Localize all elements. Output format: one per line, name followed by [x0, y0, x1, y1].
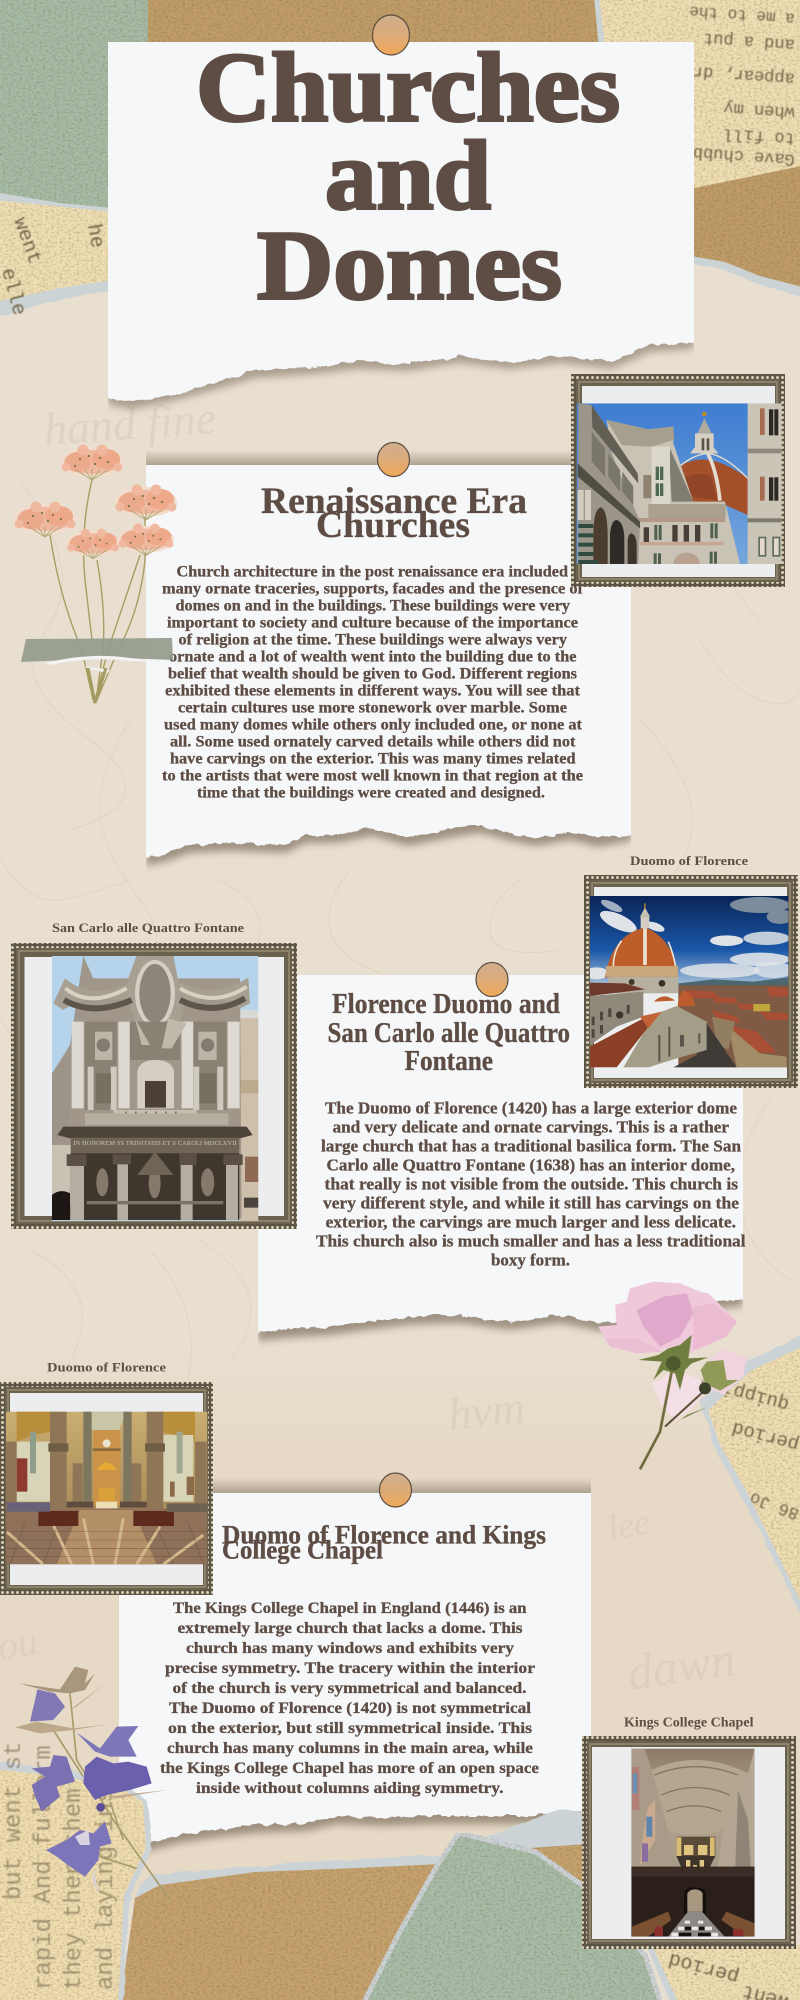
collage: left newsprint: he — [81, 222, 108, 250]
body text — [160, 1600, 539, 1797]
collage: bottom right newsprint — [646, 1945, 800, 2000]
pin — [380, 1473, 412, 1507]
body text: that really is not visible from the outside. This church is — [324, 1174, 739, 1194]
pin — [378, 442, 410, 476]
collage: top right newsprint — [594, 0, 800, 188]
body text: certain cultures use more stonework over marble. Some — [178, 700, 567, 717]
heading: Churches — [316, 505, 470, 546]
body text: to the artists that were most well known in that region at the — [162, 768, 583, 785]
icon: pink rose — [598, 1282, 747, 1469]
image caption: Duomo of Florence — [630, 853, 748, 868]
body text: church has many windows and exhibits very — [186, 1640, 514, 1657]
body text: have carvings on the exterior. This was many times related — [170, 751, 576, 768]
title — [196, 34, 620, 320]
collage: top right newsprint: to fill — [723, 123, 795, 147]
body text — [316, 1098, 746, 1270]
image: Duomo of Florence exterior with frame — [571, 374, 785, 587]
image: Duomo of Florence aerial with frame — [584, 875, 798, 1088]
body text: church has many columns in the main area, while — [167, 1740, 533, 1757]
body text: The Kings College Chapel in England (1446) is an — [173, 1600, 527, 1617]
body text: precise symmetry. The tracery within the interior — [165, 1660, 535, 1677]
body text — [162, 564, 584, 802]
collage: top right newsprint: a me to the — [689, 2, 795, 27]
collage: bottom brown paper — [120, 1808, 600, 2000]
collage: bottom left newsprint: and laying ins — [93, 1788, 120, 1990]
icon: pressed purple flowers — [15, 1667, 170, 1900]
heading — [222, 1521, 546, 1564]
body text: large church that has a traditional basilica form. The San — [321, 1136, 741, 1156]
collage: right newsprint — [698, 1332, 800, 1625]
heading: Fontane — [404, 1046, 493, 1077]
panel: Renaissance Era Churches — [130, 442, 650, 866]
collage: top left green paper — [0, 0, 151, 214]
body text: on the exterior, but still symmetrical inside. This — [168, 1720, 532, 1737]
heading — [261, 481, 527, 546]
background paper: lee — [604, 1501, 653, 1548]
title card paper — [90, 42, 710, 409]
collage: bottom left newsprint — [0, 1742, 152, 2000]
body text: The Duomo of Florence (1420) has a large exterior dome — [325, 1098, 737, 1118]
background paper: dawn — [624, 1630, 739, 1701]
body text: The Duomo of Florence (1420) is not symmetrical — [169, 1700, 532, 1717]
body text: exterior, the carvings are much larger and less delicate. — [326, 1212, 736, 1232]
title: Domes — [257, 212, 562, 320]
heading — [328, 989, 570, 1077]
pin — [476, 962, 508, 996]
body text: exhibited these elements in different ways. You will see that — [165, 683, 581, 700]
pin — [372, 15, 410, 55]
collage: left newsprint — [0, 198, 112, 318]
body text: many ornate traceries, supports, facades and the presence of — [162, 581, 584, 598]
panel: Duomo of Florence and Kings College Chapel — [100, 1473, 610, 1858]
image caption: Kings College Chapel — [624, 1714, 754, 1730]
image: Duomo of Florence interior with frame — [0, 1382, 213, 1595]
body text: and very delicate and ornate carvings. This is a rather — [332, 1118, 729, 1136]
body text: domes on and in the buildings. These buildings were very — [176, 598, 570, 615]
collage: right newsprint: quipping — [698, 1371, 792, 1415]
collage: top right newsprint: and a put — [702, 28, 795, 53]
heading: Renaissance Era — [261, 481, 527, 522]
collage: top brown paper — [148, 0, 800, 298]
body text: very different style, and while it still has carvings on the — [323, 1194, 739, 1212]
collage: left newsprint: went — [7, 215, 45, 268]
collage: right newsprint: period — [730, 1416, 800, 1455]
body text: extremely large church that lacks a dome. This — [178, 1620, 522, 1637]
image: San Carlo alle Quattro Fontane with frame: IN HONOREM SS TRINITATIS ET S CAROLI MDCLXVII — [73, 1140, 237, 1147]
heading: Duomo of Florence and Kings — [222, 1521, 546, 1550]
body text: Carlo alle Quattro Fontane (1638) has an interior dome, — [326, 1156, 735, 1174]
collage: bottom green paper — [362, 1833, 662, 2000]
background paper: hvm — [446, 1381, 527, 1440]
heading: Florence Duomo and — [332, 989, 560, 1020]
collage: top right newsprint: appear, drug — [672, 59, 795, 87]
body text: This church also is much smaller and has a less traditional — [316, 1232, 746, 1250]
body text: of religion at the time. These buildings were always very — [178, 632, 567, 649]
image: Kings College Chapel with frame — [582, 1736, 796, 1949]
image caption: Duomo of Florence — [47, 1360, 166, 1374]
body text: inside without columns aiding symmetry. — [196, 1780, 504, 1797]
collage: bottom left newsprint: rapid And fullerm — [31, 1745, 58, 1990]
collage: top right newsprint: when my — [723, 97, 795, 121]
title: Churches — [196, 34, 620, 142]
collage: bottom right newsprint: period — [666, 1947, 742, 1987]
image: San Carlo alle Quattro Fontane with frame — [11, 943, 297, 1229]
image caption: San Carlo alle Quattro Fontane — [52, 920, 244, 935]
panel: Florence Duomo and San Carlo — [240, 962, 760, 1341]
body text: Church architecture in the post renaissance era included — [176, 564, 568, 581]
body text: ornate and a lot of wealth went into the building due to the — [169, 649, 576, 666]
body text: all. Some used ornately carved details while others did not — [170, 734, 576, 751]
heading: San Carlo alle Quattro — [328, 1018, 570, 1049]
body text: boxy form. — [491, 1250, 570, 1270]
collage: bottom left newsprint: but went st — [1, 1742, 28, 1900]
title: and — [325, 122, 491, 230]
collage: bottom left newsprint: they then them — [61, 1788, 88, 1990]
body text: time that the buildings were created and designed. — [197, 785, 545, 802]
body text: important to society and culture because of the importance — [167, 615, 578, 632]
background paper: hand fine — [42, 392, 218, 455]
heading: College Chapel — [222, 1536, 383, 1564]
body text: of the church is very symmetrical and balanced. — [172, 1680, 527, 1697]
title card — [90, 15, 710, 409]
icon: pressed peach flowers with tape — [14, 444, 177, 703]
collage: top right newsprint: Gave chubby — [682, 141, 795, 168]
body text: the Kings College Chapel has more of an open space — [160, 1760, 539, 1777]
body text: used many domes while others only included one, or none at — [164, 717, 583, 734]
body text: belief that wealth should be given to God. Different regions — [168, 666, 577, 683]
